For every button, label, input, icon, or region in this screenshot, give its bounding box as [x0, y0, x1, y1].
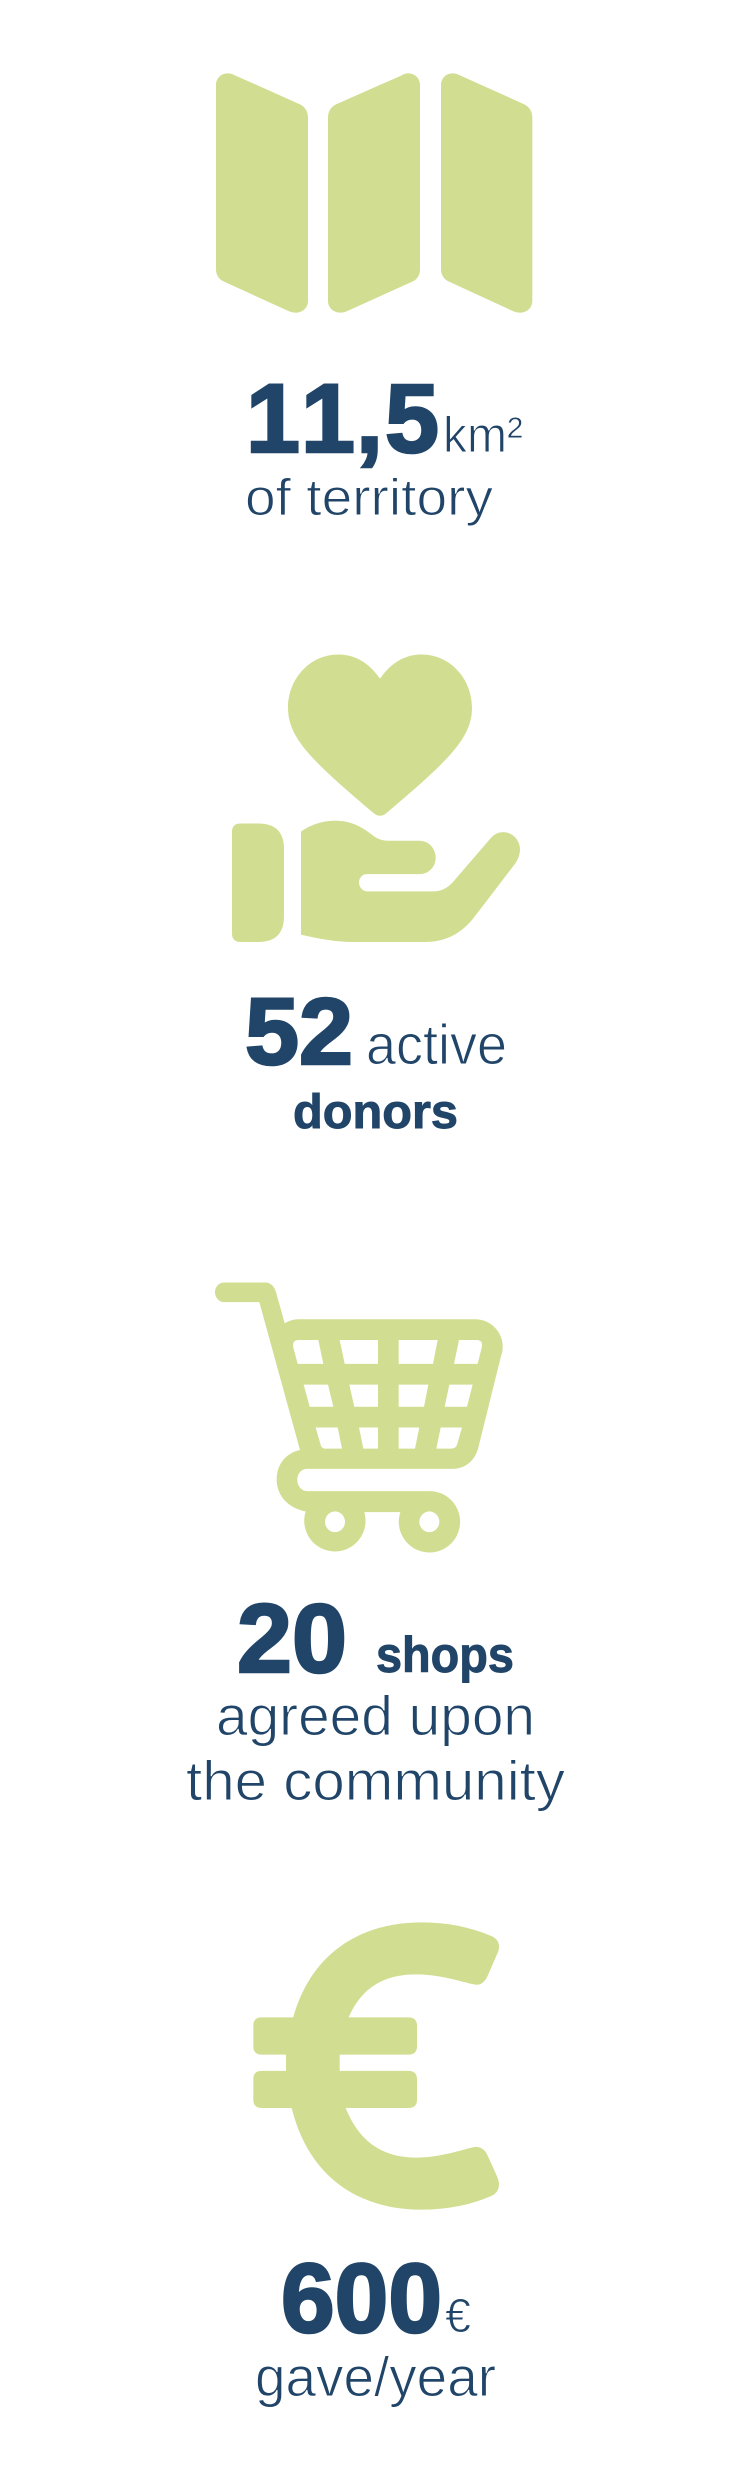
- icon: euro sign: [253, 1922, 499, 2210]
- figure: 11,5 km²: 11,5: [246, 364, 439, 473]
- icon: hand holding heart: [232, 654, 520, 942]
- figure: 20 shops: 20: [237, 1584, 347, 1693]
- figure: 600 €: €: [445, 2290, 471, 2343]
- label: gave/year: gave/year: [255, 2345, 496, 2408]
- panel: territory: [216, 73, 532, 527]
- figure: 600 €: 600: [281, 2243, 442, 2353]
- figure: 11,5 km²: [246, 364, 523, 473]
- panel: donors: [232, 654, 520, 1139]
- label: the community: the community: [186, 1749, 565, 1812]
- figure: 20 shops: shops: [376, 1627, 514, 1683]
- label: agreed upon: agreed upon: [216, 1684, 535, 1747]
- label: of territory: of territory: [245, 469, 493, 527]
- figure: 20 shops: [237, 1584, 514, 1693]
- figure: 52 active: active: [366, 1013, 507, 1077]
- panel: donations: [253, 1922, 499, 2408]
- panel: shops: [186, 1282, 565, 1812]
- figure: 52 active: 52: [245, 979, 353, 1085]
- figure: 11,5 km²: km²: [443, 407, 523, 463]
- icon: shopping cart: [215, 1282, 503, 1552]
- figure: 52 active: [245, 979, 507, 1085]
- icon: folded map: [216, 73, 532, 313]
- label: donors: donors: [293, 1086, 458, 1139]
